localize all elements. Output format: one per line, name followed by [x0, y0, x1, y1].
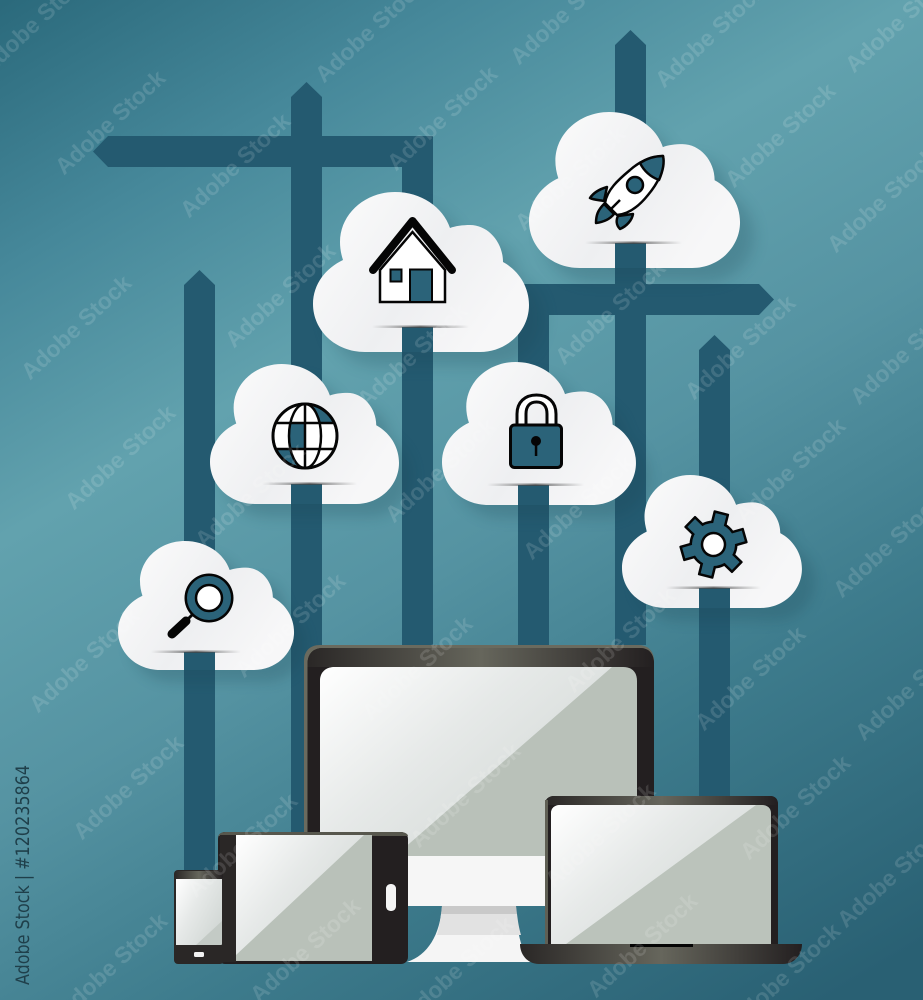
watermark: Adobe Stock [230, 567, 350, 682]
device: desktop monitor [304, 645, 654, 962]
watermark: Adobe Stock [175, 107, 295, 222]
watermark: Adobe Stock [720, 77, 840, 192]
cloud: globe [210, 364, 412, 517]
laptop base [520, 944, 802, 964]
laptop notch [630, 944, 693, 947]
device: laptop [520, 796, 802, 964]
watermark: Adobe Stock [690, 620, 810, 735]
arrow: house pillar with left pointing branch [93, 136, 433, 645]
monitor screen [320, 667, 637, 856]
watermark: Adobe Stock [16, 269, 136, 384]
watermark: Adobe Stock [540, 777, 660, 892]
arrow: gear pillar [699, 335, 730, 800]
watermark: Adobe Stock [510, 120, 630, 235]
watermark: Adobe Stock [680, 289, 800, 404]
pillars and arrows [93, 30, 774, 872]
watermark: Adobe Stock [60, 399, 180, 514]
watermark: Adobe Stock [352, 297, 472, 412]
watermark: Adobe Stock [68, 729, 188, 844]
phone screen [176, 879, 222, 945]
stock id label: Adobe Stock | #120235864 [12, 765, 34, 985]
watermark: Adobe Stock [382, 60, 502, 175]
monitor chin [406, 856, 551, 906]
watermark: Adobe Stock [518, 449, 638, 564]
icon: rocket [590, 156, 664, 229]
arrow: rocket pillar [615, 30, 646, 645]
watermark: Adobe Stock [380, 412, 500, 527]
watermark: Adobe Stock [50, 64, 170, 179]
phone button [194, 952, 204, 957]
tablet screen [236, 835, 372, 961]
watermark: Adobe Stock [190, 437, 310, 552]
laptop screen [551, 805, 771, 944]
cloud: rocket [529, 112, 754, 282]
watermark: Adobe Stock [405, 737, 525, 852]
arrow: globe pillar [291, 82, 322, 835]
icon: gear [673, 504, 754, 585]
tablet button [386, 884, 396, 911]
watermark: Adobe Stock [220, 237, 340, 352]
cloud: lock [442, 362, 649, 518]
watermark: Adobe Stock [550, 254, 670, 369]
icon: globe [273, 404, 337, 468]
device: smartphone [174, 870, 224, 964]
watermark: Adobe Stock [357, 610, 477, 725]
watermark: Adobe Stock [182, 787, 302, 902]
arrow: search pillar [184, 270, 215, 872]
icon: padlock [510, 395, 562, 468]
cloud: search [118, 541, 306, 682]
watermark: Adobe Stock [730, 412, 850, 527]
watermark: Adobe Stock [582, 887, 702, 1000]
arrow: lock pillar with right pointing branch [518, 284, 774, 645]
monitor frame [304, 645, 654, 856]
watermark: Adobe Stock [735, 749, 855, 864]
watermark: Adobe Stock [560, 582, 680, 697]
cloud: gear [622, 475, 815, 621]
icon: house [373, 221, 452, 302]
device: tablet [218, 832, 408, 964]
icon: magnifying glass [172, 574, 234, 634]
watermark: Adobe Stock [24, 602, 144, 717]
monitor stand [407, 906, 533, 962]
cloud: house [313, 192, 543, 366]
